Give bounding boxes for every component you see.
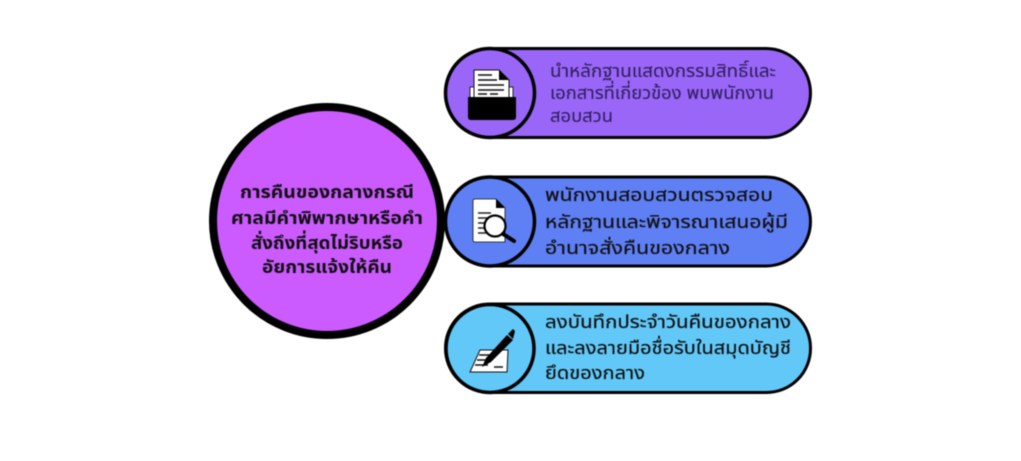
text: step 3 description: และลงลายมือชื่อรับในสมุดบัญชี — [545, 335, 791, 359]
text: step 1 description: เอกสารที่เกี่ยวข้อง พบพนักงาน — [550, 80, 774, 103]
icon: document with magnifier — [473, 199, 514, 242]
heading: main topic text: สั่งถึงที่สุดไม่ริบหรือ — [251, 230, 403, 254]
heading: main topic text: การคืนของกลางกรณี — [240, 182, 414, 202]
heading: main topic text: ศาลมีคำพิพากษาหรือคำ — [231, 208, 423, 228]
icon: document folder — [468, 70, 516, 120]
panel: step 3 record and sign — [446, 304, 810, 392]
text: step 2 description: อำนาจสั่งคืนของกลาง — [545, 236, 730, 258]
heading: main topic text: อัยการแจ้งให้คืน — [262, 257, 392, 277]
panel: main topic circle — [213, 107, 441, 335]
text: step 3 description: ลงบันทึกประจำวันคืนของกลาง — [545, 312, 791, 332]
text: step 1 description — [550, 60, 776, 126]
text: step 1 description: นำหลักฐานแสดงกรรมสิทธิ์และ — [550, 60, 776, 81]
panel: step 2 investigation — [446, 177, 810, 266]
text: step 1 description: สอบสวน — [550, 106, 613, 126]
panel: step 1 evidence submission — [446, 48, 810, 138]
text: step 2 description — [545, 185, 788, 258]
text: step 2 description: พนักงานสอบสวนตรวจสอบ — [545, 185, 773, 205]
text: step 3 description — [545, 312, 791, 383]
text: step 3 description: ยึดของกลาง — [545, 363, 645, 383]
icon: pen signing paper — [470, 329, 515, 372]
text: step 2 description: หลักฐานและพิจารณาเสนอผู้มี — [545, 212, 788, 234]
heading: main topic text — [231, 182, 423, 277]
